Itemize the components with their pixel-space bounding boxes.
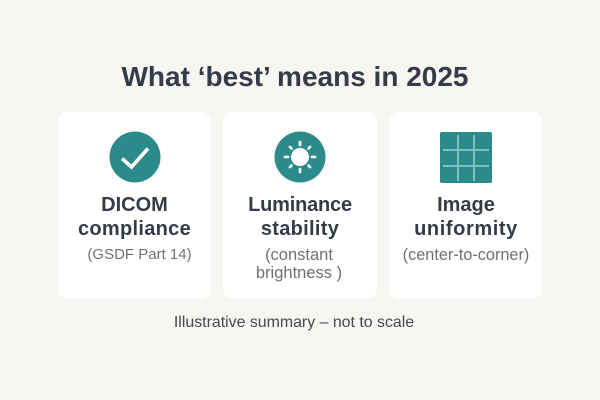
panel: Image uniformity (389, 112, 542, 299)
heading: DICOM compliance: compliance (78, 218, 191, 240)
heading: Luminance stability (248, 194, 352, 240)
panel: Luminance stability (223, 112, 377, 299)
icon: sun circle (274, 132, 326, 182)
heading: DICOM compliance: DICOM (101, 194, 168, 216)
icon: check circle (110, 132, 160, 182)
heading: Image uniformity (414, 194, 518, 240)
panel: DICOM compliance (58, 112, 211, 299)
subtext: GSDF Part 14: (GSDF Part 14) (87, 246, 192, 263)
subtext: constant brightness: brightness ) (256, 264, 342, 282)
heading: Luminance stability: Luminance (248, 194, 352, 216)
heading: DICOM compliance (78, 194, 191, 240)
heading: Image uniformity: uniformity (414, 218, 518, 240)
heading: Luminance stability: stability (261, 218, 339, 240)
heading: Image uniformity: Image (437, 194, 495, 216)
subtext: center-to-corner: (center-to-corner) (403, 246, 529, 264)
subtext: constant brightness (256, 246, 342, 282)
caption: Illustrative summary – not to scale (174, 314, 414, 331)
subtext: constant brightness: (constant (265, 246, 333, 264)
title: What ‘best’ means in 2025 (121, 61, 469, 92)
icon: grid (440, 132, 492, 183)
